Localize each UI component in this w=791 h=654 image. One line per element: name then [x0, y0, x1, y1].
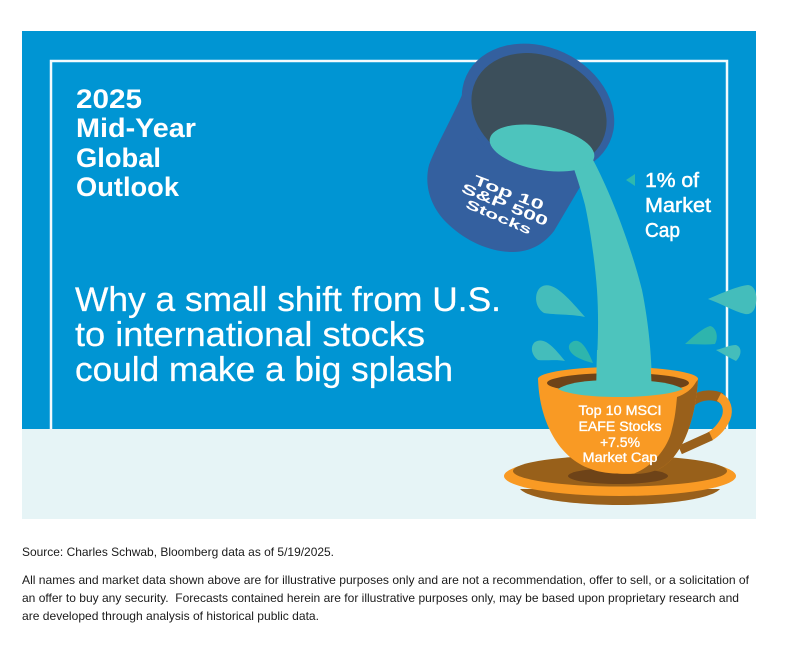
cup shaded side	[632, 378, 698, 474]
cup label: Market Cap	[582, 450, 658, 465]
pouring liquid stream	[573, 158, 652, 392]
cup label: +7.5%	[600, 435, 640, 450]
cup body	[538, 368, 698, 474]
title: Mid-Year	[76, 113, 197, 143]
panel: pale table surface	[22, 429, 756, 519]
label: 1% of market cap: Cap	[645, 220, 680, 242]
label: 1% of market cap	[626, 170, 711, 242]
stream entering tea	[596, 350, 652, 396]
splash droplets	[532, 285, 756, 363]
cup label	[578, 403, 662, 465]
mug label: Top 10	[471, 172, 547, 213]
title: Outlook	[76, 172, 180, 202]
cup handle	[692, 395, 721, 401]
tea surface	[558, 380, 683, 397]
headline text: Why a small shift from U.S.	[75, 281, 501, 319]
white frame	[51, 61, 727, 429]
disclaimer text	[22, 573, 750, 623]
saucer	[504, 456, 736, 505]
cup label: EAFE Stocks	[578, 419, 662, 434]
disclaimer text: All names and market data shown above are for illustrative purposes only and are not a recommendation, offer to sell, or a solicitation of	[22, 573, 750, 587]
title	[76, 84, 197, 202]
label: 1% of market cap: 1% of	[645, 170, 699, 192]
source note: Source: Charles Schwab, Bloomberg data as of 5/19/2025.	[22, 545, 334, 559]
mug label: S&P 500	[459, 180, 551, 229]
mug label	[459, 172, 551, 237]
icon: orange teacup and saucer	[504, 350, 736, 505]
panel: blue background	[22, 31, 756, 429]
cup rim	[538, 367, 698, 391]
mug label: Stocks	[464, 196, 534, 237]
headline text	[75, 281, 501, 389]
headline text: could make a big splash	[75, 351, 453, 389]
title: Global	[76, 143, 161, 173]
liquid surface in mug	[486, 117, 598, 179]
disclaimer text: an offer to buy any security. Forecasts contained herein are for illustrative purposes only, may be based upon proprietary research and	[22, 591, 739, 605]
label: 1% of market cap: Market	[645, 195, 711, 217]
headline text: to international stocks	[75, 316, 425, 354]
icon: pouring mug	[427, 19, 636, 252]
cup label: Top 10 MSCI	[578, 403, 662, 418]
disclaimer text: are developed through analysis of historical public data.	[22, 609, 319, 623]
title: 2025	[76, 84, 142, 114]
